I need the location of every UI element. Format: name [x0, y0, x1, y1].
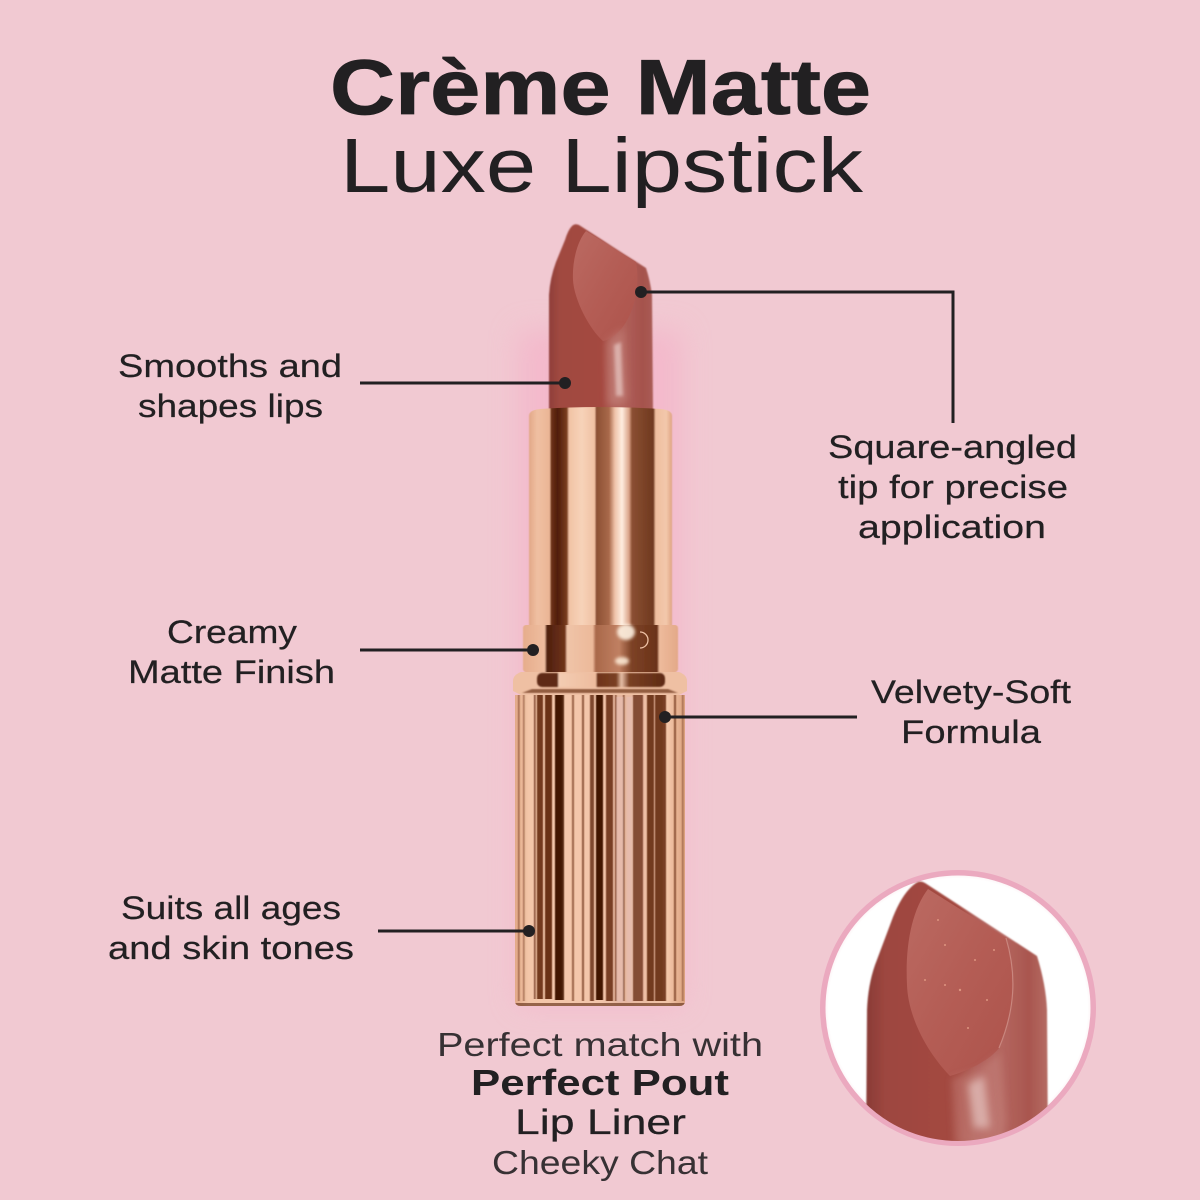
lipstick fluted base — [515, 695, 685, 1007]
callout: smooths and shapes lips: Smooths and — [118, 348, 342, 384]
callout: velvety-soft formula: Velvety-Soft — [871, 674, 1071, 710]
callout: creamy matte finish — [128, 614, 539, 690]
lipstick flange — [513, 672, 687, 695]
callout: velvety-soft formula: Formula — [901, 714, 1041, 750]
lipstick product — [513, 224, 687, 1007]
title — [330, 43, 871, 209]
callout: suits all ages: Suits all ages — [121, 890, 341, 926]
callout: smooths and shapes lips: shapes lips — [138, 388, 323, 424]
callout: suits all ages: and skin tones — [108, 930, 354, 966]
title: Crème Matte — [330, 43, 871, 131]
title: Luxe Lipstick — [340, 123, 864, 209]
callout: velvety-soft formula — [659, 674, 1071, 750]
callout: square-angled tip — [635, 286, 1077, 545]
text block: perfect match: Perfect Pout — [471, 1062, 729, 1103]
lipstick bullet — [549, 224, 653, 410]
callout: square-angled tip: application — [858, 509, 1046, 545]
lipstick collar ring — [523, 624, 678, 672]
text block: perfect match: Lip Liner — [515, 1103, 686, 1142]
callout: square-angled tip: tip for precise — [838, 469, 1068, 505]
callout: smooths and shapes lips — [118, 348, 571, 424]
callout: creamy matte finish: Creamy — [167, 614, 297, 650]
callout: suits all ages — [108, 890, 535, 966]
lipstick upper tube — [529, 407, 672, 628]
text block: perfect match: Perfect match with — [437, 1026, 763, 1063]
pink glow behind lipstick — [518, 330, 682, 1005]
callout: creamy matte finish: Matte Finish — [128, 654, 335, 690]
callout: square-angled tip: Square-angled — [828, 429, 1077, 465]
inset: lipstick close-up — [822, 872, 1094, 1150]
text block: perfect match — [437, 1026, 763, 1181]
text block: perfect match: Cheeky Chat — [492, 1144, 708, 1181]
